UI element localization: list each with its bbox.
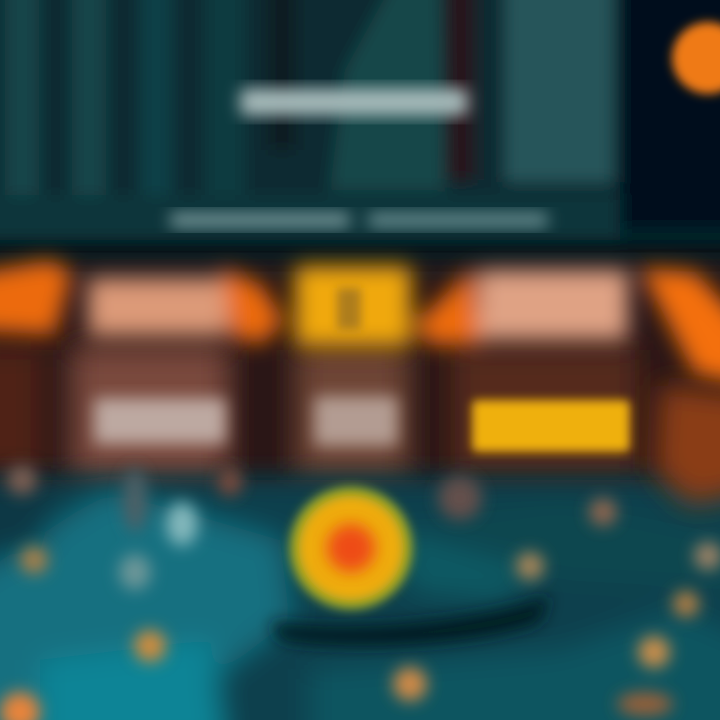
orange network nodes [0, 498, 720, 720]
vertical stripes [5, 0, 296, 195]
panel: header cards row [0, 260, 720, 385]
icon: target circle [289, 486, 413, 610]
card: right chevron [640, 268, 720, 385]
text: centre header mark [337, 288, 361, 330]
dark divider band [0, 240, 720, 266]
card: left chevron [0, 260, 72, 335]
text block: left [94, 398, 226, 444]
subtitle band [0, 195, 620, 240]
tall block: right [505, 0, 613, 182]
panel: header background [0, 0, 720, 266]
card: first header [88, 278, 228, 336]
icon: orange sun circle [672, 22, 720, 94]
dark red column [445, 0, 475, 180]
dark navy corner [620, 0, 720, 230]
chevron connector [414, 268, 480, 345]
panel: middle band [0, 262, 720, 487]
subtitle [170, 212, 548, 228]
dark swoosh [270, 596, 550, 646]
text block: centre [314, 396, 398, 446]
panel: lower teal area [0, 480, 720, 720]
title [240, 88, 468, 116]
pale network nodes [7, 465, 482, 590]
card: third header [478, 270, 628, 340]
chevron connector [222, 268, 284, 344]
callout: yellow bar [472, 400, 630, 452]
tall block: centre [330, 0, 445, 190]
orange glow: right side of middle band [655, 385, 720, 505]
card: centre yellow header [295, 266, 411, 346]
